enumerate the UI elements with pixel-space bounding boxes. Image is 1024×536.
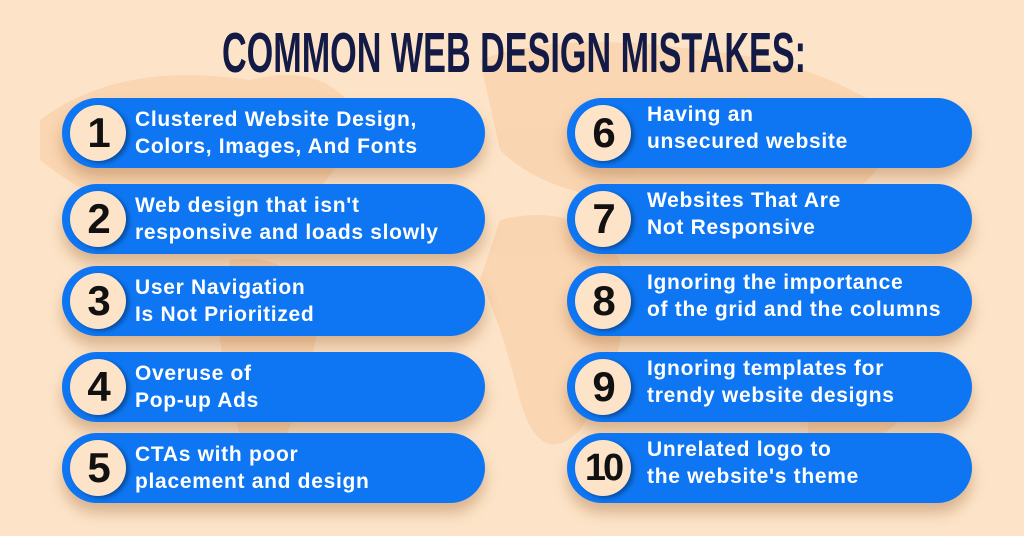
item 9: 9 bbox=[592, 363, 614, 410]
item 7 bbox=[567, 184, 972, 254]
item 1 bbox=[62, 98, 485, 168]
item 3: 3 bbox=[87, 277, 109, 324]
item 10: the website's theme bbox=[647, 465, 859, 488]
item 2: Web design that isn't bbox=[135, 194, 360, 217]
item 8: Ignoring the importance bbox=[647, 271, 903, 294]
item 4 bbox=[62, 352, 485, 422]
item 7: Websites That Are bbox=[647, 189, 841, 212]
item 5: 5 bbox=[87, 444, 109, 491]
item 6: Having an bbox=[647, 103, 754, 126]
item 4: 4 bbox=[87, 363, 109, 410]
item 7: 7 bbox=[592, 195, 614, 242]
item 9: Ignoring templates for bbox=[647, 357, 884, 380]
item 5: CTAs with poor bbox=[135, 443, 298, 466]
item 4: Pop-up Ads bbox=[135, 389, 259, 412]
item 4: Overuse of bbox=[135, 362, 252, 385]
item 8: 8 bbox=[592, 277, 614, 324]
item 1: Colors, Images, And Fonts bbox=[135, 135, 418, 158]
item 5: placement and design bbox=[135, 470, 370, 493]
item 8 bbox=[567, 266, 972, 336]
item 6: unsecured website bbox=[647, 130, 848, 153]
item 1: Clustered Website Design, bbox=[135, 108, 417, 131]
item 3 bbox=[62, 266, 485, 336]
item 2 bbox=[62, 184, 485, 254]
item 2: 2 bbox=[87, 195, 109, 242]
item 7: Not Responsive bbox=[647, 216, 816, 239]
item 9: trendy website designs bbox=[647, 384, 895, 407]
item 3: Is Not Prioritized bbox=[135, 303, 314, 326]
item 10 bbox=[567, 433, 972, 503]
item 3: User Navigation bbox=[135, 276, 305, 299]
item 10: 10 bbox=[585, 447, 621, 489]
item 5 bbox=[62, 433, 485, 503]
item 6 bbox=[567, 98, 972, 168]
item 1: 1 bbox=[87, 109, 109, 156]
item 8: of the grid and the columns bbox=[647, 298, 941, 321]
item 6: 6 bbox=[592, 109, 614, 156]
item 2: responsive and loads slowly bbox=[135, 221, 439, 244]
item 10: Unrelated logo to bbox=[647, 438, 832, 461]
item 9 bbox=[567, 352, 972, 422]
